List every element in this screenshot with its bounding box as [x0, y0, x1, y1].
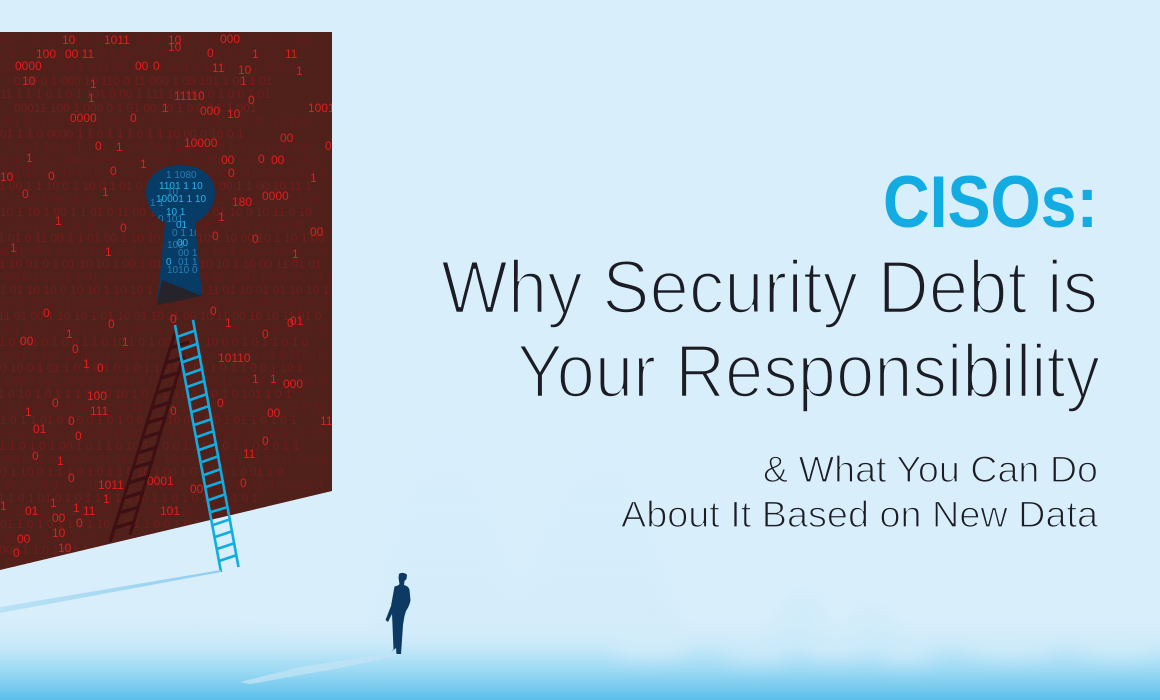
bright binary digits: 00: [271, 153, 285, 167]
bright binary digits: 10: [168, 40, 182, 54]
bright binary digits: 0: [13, 546, 20, 560]
bright binary digits: 10: [22, 74, 36, 88]
bright binary digits: 00: [221, 153, 235, 167]
bright binary digits: 10: [168, 33, 182, 47]
keyhole binary digits: 1 1080: [166, 170, 197, 181]
keyhole binary digits: 1 1: [150, 198, 164, 209]
dim binary rows: 0 01 10 10 11 01 00 11 01 01 01 10 01 10 10 10 01 10 11 01: [4, 426, 325, 440]
dim binary rows: 0 01 1 1 0 101 1 11 1 1 01 00 1 1 00 11 0 1 00 1 1 10 1 00: [6, 140, 315, 154]
dim binary rows: [0, 33, 334, 570]
bright binary digits: 10000: [184, 136, 218, 150]
dim binary rows: 000 0 11 1 0 01 0 110 1 0 11 00 1 01 10 0 1 01 1 00 1 0 101: [0, 33, 315, 47]
bright binary digits: 00: [135, 59, 149, 73]
bright binary digits: 1: [270, 372, 277, 386]
dim binary rows: 1 10 01 0 1 01 10 10 1 00 1 01 10 01 10 10 1 10 00 11 01 01: [0, 257, 322, 271]
bright binary digits: 0: [130, 111, 137, 125]
bright binary digits: 1: [225, 316, 232, 330]
bright binary digits: 0: [240, 476, 247, 490]
dim binary rows: 0 01 01 10 11 01 00 1 10 10 01 10 10 10 10 01 10 11 01 00 1: [4, 296, 330, 310]
bright binary digits: 0: [95, 139, 102, 153]
bright binary digits: 10110: [218, 351, 251, 365]
dim binary rows: 0 11 00 1 10 10 1 00 1 01 10 1 10 00 1 10 1 01 01 10 01 1 01: [3, 244, 329, 258]
bright binary digits: 000: [220, 32, 240, 46]
bright binary digits: 1: [55, 214, 62, 228]
keyhole binary digits: 0 1 10: [172, 228, 200, 239]
bright binary digits: 000: [200, 104, 220, 118]
bright binary digits: 0: [170, 404, 177, 418]
dim binary rows: 1 01 10 10 0 10 10 1 10 10 1 10 01 00 11 01 10 01 01 10 10 1: [0, 283, 330, 297]
dim binary rows: 1 00 1 1 10 0 1 10 0 1 01 0 1 00 1 1 10 1 00 1 1 00 10 11 1: [0, 179, 312, 193]
dim binary rows: 0 10 0 1 01 1 0 1 0 1 0 1 0 1 1 0 0 1 01 1 0 1 1 0 0 1 10 1: [0, 361, 304, 375]
bright binary digits: 0: [32, 449, 39, 463]
keyhole binary digits: 01: [176, 220, 188, 231]
bright binary digits: 10: [52, 526, 66, 540]
bright binary digits: 1: [73, 501, 80, 515]
bright binary digits: 0: [68, 414, 75, 428]
bright binary digits: 1: [57, 454, 64, 468]
bright binary digits: 0: [248, 93, 255, 107]
keyhole binary digits: 00: [177, 238, 189, 249]
bright binary digits: 1: [240, 74, 247, 88]
bright binary digits: 0: [210, 304, 217, 318]
bright binary digits: 0: [252, 232, 259, 246]
dim binary rows: 0000 110 1 00 1 0 11 00 1 01 1 00 1 0 11 01 00 1 10 1 01: [0, 60, 303, 74]
bright binary digits: 01: [290, 314, 304, 328]
bright binary digits: 1: [25, 405, 32, 419]
dim binary rows: 0 1 10 1 00 0 1 0 1 00 10 1 00 1 0 01 1 01 0 11 00 1 011 0: [3, 114, 312, 128]
bright binary digits: 11: [285, 47, 298, 61]
bright binary digits: 1: [162, 101, 169, 115]
dim binary rows: 0 01 1 01 0 11 00 1 01 01 10 0 1 01 10 100 11 0 1 01 00 1 1: [6, 218, 325, 232]
background mountains: [370, 410, 920, 655]
bright binary digits: 01: [33, 422, 47, 436]
bright binary digits: 0000: [262, 189, 289, 203]
keyhole binary digits: 10: [167, 187, 179, 198]
dim binary rows: 10 11 01 00 11: [4, 556, 83, 570]
bright binary digits: 0: [153, 59, 160, 73]
keyhole binary digits: 0: [166, 257, 172, 268]
bright binary digits: 0: [287, 316, 294, 330]
bright binary digits: 00: [52, 511, 66, 525]
bright binary digits: 01: [25, 504, 39, 518]
bright binary digits: 1: [90, 77, 97, 91]
keyhole binary digits: 10 1: [166, 207, 186, 218]
dim binary rows: 1 0 011 0 1 0 0 1 1 0 10 1 0 1 00 1 0 1 10 0 0 1 0 1 1 0 1 0: [0, 335, 309, 349]
bright binary digits: 1: [310, 171, 317, 185]
bright binary digits: 00: [190, 482, 204, 496]
ladder shadow: [110, 333, 189, 542]
bright binary digits: 180: [232, 195, 252, 209]
bright binary digits: 10: [227, 107, 241, 121]
bright binary digits: 0: [97, 361, 104, 375]
bright binary digits: 0: [48, 169, 55, 183]
bright binary digits: 1: [26, 151, 33, 165]
bright binary digits: 0: [72, 342, 79, 356]
bright binary digits: 000: [283, 377, 303, 391]
bright binary digits: 0: [170, 312, 177, 326]
bright binary digits: 00: [267, 406, 281, 420]
dim binary rows: 0 1 00 1 00 11 0 1 1 01 0 100 1 01 10 1 1 00 0 10 1 00 1 10: [4, 192, 320, 206]
bright binary digits: 1: [292, 247, 299, 261]
bright binary digits: 1011: [98, 478, 124, 492]
bright binary digits: 0000: [70, 111, 97, 125]
bright binary digits: 0: [52, 396, 59, 410]
keyhole binary digits: 00 1: [178, 248, 198, 259]
dim binary rows: 1 01 0 11 00 1 1 01 00 1 10 10 100 1 10 1 10 00 10 1 10 1 00: [0, 231, 324, 245]
dim binary rows: 1 00 11 01 10 10 0 11 01 0 110 01 10 10 11 00 10 10 11 01 0: [3, 374, 326, 388]
bright binary digits: 1: [10, 241, 17, 255]
bright binary digits: 1: [252, 47, 259, 61]
bright binary digits: 1: [105, 245, 112, 259]
bright binary digits: 0: [22, 187, 29, 201]
dim binary rows: 01 0 11 0 1 1000 10 0 1 1 01 00 1 01 1 00 1 01 0 11 00 1 011: [0, 153, 323, 167]
bright binary digits: 0000: [15, 59, 42, 73]
bright binary digits: 11110: [174, 89, 205, 103]
bright binary digits: 100: [36, 47, 56, 61]
keyhole binary digits: 01 1: [178, 257, 198, 268]
bright binary digits: 1: [102, 185, 109, 199]
bright binary digits: 0: [68, 471, 75, 485]
bright binary digits: 11: [320, 414, 333, 428]
dim binary rows: 11 1 1 1 0 1 0 1 101 0 00 1 111 10 101 0 1 0 0 1 01: [0, 87, 271, 101]
bright binary digits: 100: [87, 389, 107, 403]
dim binary rows: 0 10 0 1 000 10 110 0 11 000 1 00 101 1 00 1 01: [14, 74, 273, 88]
bright binary digits: 00: [17, 532, 31, 546]
bright binary digits: 1011: [104, 33, 130, 47]
bright binary digits: 00: [20, 334, 34, 348]
bright binary digits: 0: [262, 434, 269, 448]
subtitle line two: About It Based on New Data: [621, 494, 1098, 535]
bright binary digits: 1: [116, 140, 123, 154]
bright binary digits: 00: [310, 225, 324, 239]
bright binary digits: 1: [50, 496, 57, 510]
dim binary rows: 0 11 0 101 10 01 01 10 101 0 11 00 11 01 01 10 01 0 110 10: [5, 348, 325, 362]
bright binary digits: 111: [90, 404, 109, 418]
bright binary digits: 10: [62, 33, 76, 47]
keyhole: [146, 165, 215, 305]
ground fog: [0, 612, 1160, 700]
bright binary digits: 1: [218, 210, 225, 224]
dim binary rows: 10 1 10 1 00 1 1 01 0 11 00 1 1 01 01 0 01 10 0 10 11 0 10: [0, 205, 312, 219]
bright binary digits: 0: [262, 327, 269, 341]
bright binary digits: 101: [160, 504, 180, 518]
subtitle line one: & What You Can Do: [763, 449, 1098, 490]
dim binary rows: 0 10 1 10 01 1 01 10 10 0 11 01 0 100 10 11 01 10 01 01 01 1: [5, 270, 334, 284]
bright binary digits: 0: [120, 221, 127, 235]
bright binary digits: 1: [103, 492, 110, 506]
ladder: [175, 320, 238, 572]
bright binary digits: 10: [58, 541, 72, 555]
dim binary rows: 00011 100 1 000 0 1 01 00 10 1 0 0 0 1 1 001: [14, 101, 257, 115]
bright binary digits: 1: [83, 357, 90, 371]
title: CISOs: CISOs:: [883, 162, 1098, 243]
dim binary rows: 10 10 01 10 10 11 01 01 10 01 10 10 11 00 10 11 01 01 01 1: [3, 478, 324, 492]
bright binary digits: 1: [252, 372, 259, 386]
bright binary digits: 1: [122, 335, 129, 349]
title: your responsibility: Your Responsibility: [517, 329, 1100, 413]
bright binary digits: 0: [217, 396, 224, 410]
bright binary digits: 0: [75, 429, 82, 443]
bright binary digits: 1: [296, 64, 303, 78]
bright binary digits: 1: [0, 499, 7, 513]
dim binary rows: 000 1 1 0 1 0 1 1 0 1 0: [0, 543, 119, 557]
keyhole binary digits: 1010 0: [167, 265, 198, 276]
bright binary digits: 1: [140, 157, 147, 171]
bright binary digits: 11: [243, 447, 256, 461]
bright binary digits: 0: [212, 229, 219, 243]
bright binary digits: 0: [207, 46, 214, 60]
bright binary digits: 0: [228, 166, 235, 180]
bright binary digits: 0001: [147, 474, 174, 488]
bright binary digits: [0, 32, 335, 560]
keyhole binary digits: 1101 1 10: [159, 181, 203, 192]
keyhole binary digits: 10001 1 10: [156, 194, 206, 205]
dim binary rows: 1 1 0 1 01 0 1 0 1 1 0 1 0 10 1 1 0 1 0 1 0 1 1 0 1: [0, 491, 259, 505]
keyhole binary digits: 103: [167, 240, 184, 251]
bright binary digits: 1: [88, 91, 95, 105]
dim binary rows: 0 1 01 10 10 01 1 01 01 10 01 01 01 10 10 01 01 10 10 10 11: [3, 322, 329, 336]
dim binary rows: 00 1 1 00 1 1 00 10 1 10 00 1 0 11 0 01 1 0 1 00 1 1 01 1: [2, 47, 305, 61]
keyhole dark base: [157, 280, 202, 305]
bright binary digits: 11: [212, 61, 225, 75]
ladder cast light beam: [0, 570, 221, 613]
bright binary digits: 0: [110, 164, 117, 178]
bright binary digits: 00: [280, 131, 294, 145]
bright binary digits: 0: [258, 152, 265, 166]
bright binary digits: 1: [66, 327, 73, 341]
dim binary rows: 0 1 10 0 1 1 1 0 1 0 1 1 0 10 1 00 1 0 1 1 0 1 0 01 1 0: [0, 465, 284, 479]
dim binary rows: 1 0 1 1 01 0 1 0 0 1 0 1 0 0 1 1 10 0 1 1 0 1 01 1 0 1 0 1: [0, 413, 297, 427]
keyhole binary digits: [150, 170, 206, 276]
dim binary rows: 0 11 00 10 11 01 01 00 11 01 01 10 100 11 01 01 10 01 0 11: [6, 400, 325, 414]
dim binary rows: 01 1 1 0 0000 1 1 0 1 1 1 0 1 1 10 00 0 10 0 1: [0, 127, 244, 141]
dim binary rows: 0 11 01 00 11 01 01 10 01 01 10 10 10 11 00 11 01 01: [5, 504, 292, 518]
keyhole binary digits: 0 101: [158, 214, 183, 225]
bright binary digits: 0: [76, 516, 83, 530]
person silhouette: [386, 573, 410, 654]
dim binary rows: 10 01 10 10 11 00 11 01 01 10 10 1: [3, 530, 192, 544]
dim binary rows: 0 10 11 01 10 01 01 01 10 10 10 01 10 10 11 01 00 11 01 01: [5, 452, 326, 466]
bright binary digits: 10: [0, 170, 14, 184]
bright binary digits: 0: [108, 317, 115, 331]
dim binary rows: 1 1 0 1 0 1 00 1 0 1 1 0 10 1 1 0 0 1 1 0 1 0 1 1 0 1 0 1 1: [0, 439, 300, 453]
dim binary rows: 11 01 00 1 10 10 1 01 10 01 10 11 00 10 11 00 10 10 11 01 0: [0, 309, 322, 323]
title: why security debt is: Why Security Debt is: [441, 245, 1098, 329]
dim binary rows: 01 1 0 1 0 1 1 0 1 10 1 0 1 1 0 0 1 0 1: [0, 517, 200, 531]
bright binary digits: 0: [325, 139, 332, 153]
person shadow: [240, 653, 405, 684]
bright binary digits: 11: [83, 504, 96, 518]
bright binary digits: 00 11: [65, 47, 94, 61]
bright binary digits: 1001: [308, 101, 335, 115]
dim binary rows: 0 1 11 0 1 10 0 10 11 00 1 1 01 00 1 01 10 1 01 00 0 1 011 1: [5, 166, 326, 180]
bright binary digits: 0: [43, 306, 50, 320]
dim binary rows: 1 0 10 1 0 1 1 1 0 1 0 10 1 0 1 1 0 0 1 1 0 1 0 101 1 0 1: [0, 387, 292, 401]
bright binary digits: 10: [238, 63, 252, 77]
wall of binary code: [0, 32, 335, 572]
